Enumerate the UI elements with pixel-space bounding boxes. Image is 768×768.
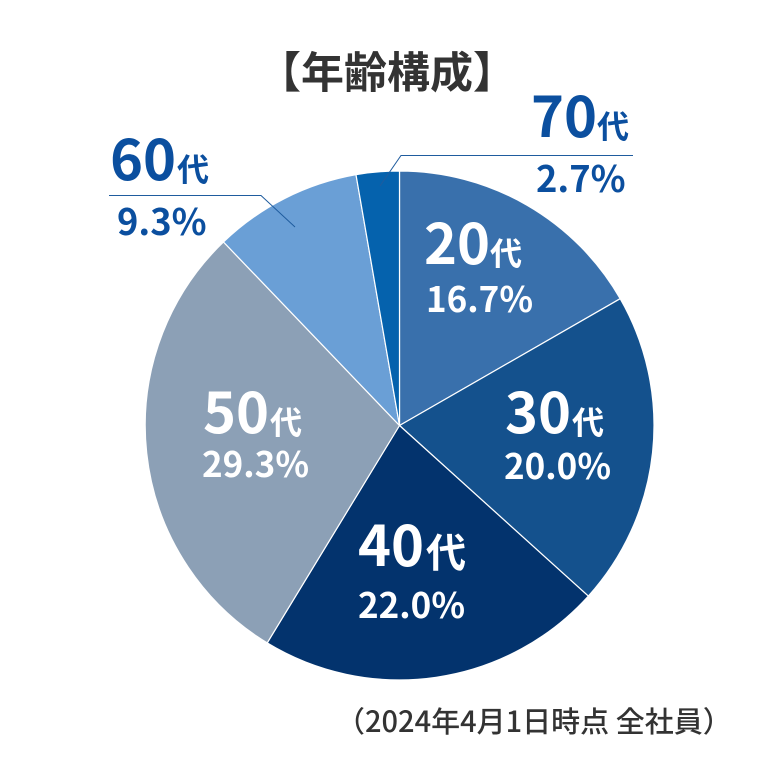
slice: 30代 <box>400 299 654 596</box>
label: 50代: 50 <box>203 369 269 450</box>
slice: 40代 <box>267 426 588 680</box>
label: 30代 <box>504 369 611 490</box>
label: 20代: 20 <box>424 200 490 281</box>
pie chart <box>145 171 654 680</box>
slice: 60代 <box>224 175 400 426</box>
label: 40代: 代 <box>426 521 466 579</box>
label: 20代: 代 <box>490 229 522 275</box>
label: 40代: 40 <box>358 502 424 583</box>
title: 【年齢構成】 <box>258 39 516 101</box>
slice: 70代 <box>356 171 400 426</box>
label: 70代: 代 <box>597 102 629 148</box>
label: 20代: 16.7% <box>426 272 533 323</box>
leader line: 70代 <box>380 156 633 186</box>
label: 70代 <box>531 73 629 203</box>
label: 20代 <box>424 200 533 323</box>
label: 50代: 代 <box>270 398 302 444</box>
label: 30代: 30 <box>505 369 571 450</box>
label: 60代: 60 <box>110 116 176 197</box>
label: 60代: 9.3% <box>117 194 207 246</box>
label: 50代 <box>202 369 309 488</box>
slice: 20代 <box>400 171 620 426</box>
label: 30代: 代 <box>572 398 604 444</box>
label: 60代 <box>110 116 209 246</box>
label: 40代: 22.0% <box>358 578 465 629</box>
slice: 50代 <box>145 242 400 643</box>
label: 70代: 2.7% <box>536 151 626 203</box>
label: 70代: 70 <box>531 73 597 154</box>
footnote: （2024年4月1日時点 全社員） <box>336 699 732 741</box>
label: 40代 <box>358 502 466 629</box>
label: 60代: 代 <box>177 145 209 191</box>
label: 50代: 29.3% <box>202 437 309 488</box>
leader line: 60代 <box>109 196 295 227</box>
label: 30代: 20.0% <box>504 439 611 490</box>
